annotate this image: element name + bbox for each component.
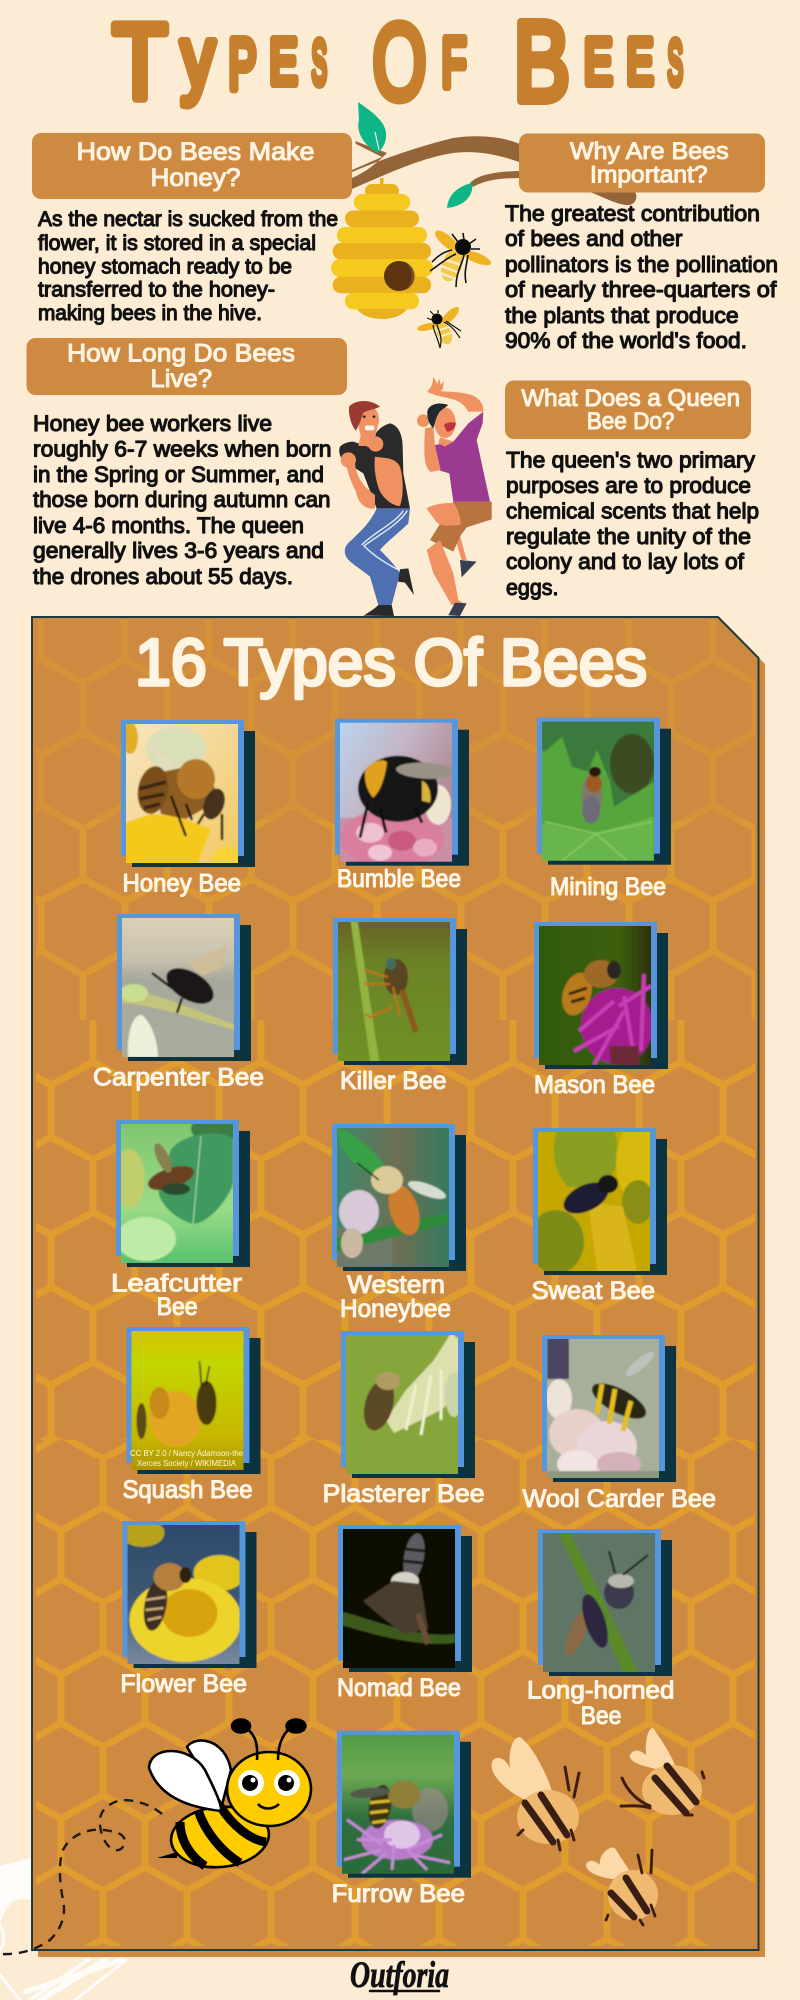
photo: killer bee bbox=[333, 917, 467, 1066]
card: squash bee bbox=[122, 1326, 260, 1504]
label: long-horned bee: Long-horned bbox=[527, 1677, 674, 1705]
text: why are bees important: The greatest contribution bbox=[505, 201, 760, 226]
label: plasterer bee: Plasterer Bee bbox=[322, 1480, 485, 1508]
photo: flower bee bbox=[120, 1519, 256, 1669]
text: how do bees make honey: As the nectar is sucked from the bbox=[38, 208, 338, 231]
photo: honey bee bbox=[121, 719, 255, 871]
text: how long do bees live: the drones about 55 days. bbox=[33, 564, 293, 589]
text: what does a queen bee do: colony and to lay lots of bbox=[506, 549, 745, 574]
label: leafcutter bee: Leafcutter bbox=[111, 1270, 242, 1298]
card: furrow bee bbox=[332, 1730, 471, 1908]
text: what does a queen bee do: The queen's two primary bbox=[506, 448, 755, 473]
photo: mining bee bbox=[537, 717, 671, 866]
photo credit: Xerces Society / WIKIMEDIA bbox=[137, 1458, 236, 1468]
label: furrow bee: Furrow Bee bbox=[332, 1880, 465, 1908]
panel shadow bbox=[38, 658, 765, 1957]
title: E bbox=[584, 26, 612, 98]
text: what does a queen bee do: purposes are to produce bbox=[506, 473, 751, 498]
text: S bbox=[668, 29, 683, 98]
title: P bbox=[228, 26, 256, 104]
text: how long do bees live: live 4-6 months. The queen bbox=[33, 513, 304, 538]
card: wool carder bee bbox=[522, 1334, 716, 1513]
text: why are bees important: the plants that produce bbox=[505, 303, 739, 328]
honeycomb pattern bbox=[36, 820, 755, 1946]
card: honey bee bbox=[121, 719, 255, 898]
card: mason bee bbox=[534, 921, 668, 1099]
label: mason bee: Mason Bee bbox=[534, 1071, 655, 1099]
panel: how do bees make honey heading: Honey? bbox=[150, 164, 240, 192]
title: E bbox=[626, 26, 654, 98]
text: why are bees important: pollinators is the pollination bbox=[505, 252, 778, 277]
text: what does a queen bee do: eggs. bbox=[506, 575, 558, 600]
label: western honeybee: Western bbox=[347, 1271, 445, 1299]
text: how do bees make honey: flower, it is stored in a special bbox=[38, 232, 316, 255]
photo: western honeybee bbox=[332, 1123, 466, 1273]
text: what does a queen bee do bbox=[506, 448, 759, 600]
text: how long do bees live: roughly 6-7 weeks when born bbox=[33, 436, 332, 462]
title: S bbox=[312, 29, 327, 98]
text: how long do bees live: generally lives 3-6 years and bbox=[33, 538, 324, 563]
photo: furrow bee bbox=[337, 1730, 471, 1879]
panel: how long do bees live heading bbox=[26, 338, 347, 395]
photo: plasterer bee bbox=[341, 1330, 475, 1479]
card: plasterer bee bbox=[322, 1330, 485, 1508]
card: killer bee bbox=[333, 917, 467, 1095]
text: why are bees important: of bees and other bbox=[505, 226, 682, 251]
photo: mason bee bbox=[534, 921, 668, 1070]
panel heading: 16 Types Of Bees bbox=[135, 625, 647, 699]
card: leafcutter bee bbox=[111, 1115, 250, 1321]
card: bumble bee bbox=[335, 718, 469, 893]
icon: bee small bbox=[416, 304, 462, 348]
brush strokes bbox=[0, 1858, 126, 2000]
title: F bbox=[442, 24, 466, 102]
text: how do bees make honey: making bees in the hive. bbox=[38, 302, 262, 325]
panel: why are bees important heading bbox=[519, 134, 765, 192]
panel: what does a queen bee do heading: What Does a Queen bbox=[521, 385, 740, 412]
card: long-horned bee bbox=[527, 1528, 674, 1730]
label: western honeybee bbox=[340, 1271, 451, 1323]
text: how long do bees live: Honey bee workers live bbox=[33, 411, 272, 436]
label: nomad bee: Nomad Bee bbox=[337, 1674, 461, 1702]
panel: what does a queen bee do heading: Bee Do? bbox=[587, 408, 674, 435]
title: T bbox=[112, 2, 168, 122]
panel: how do bees make honey heading: How Do Bees Make bbox=[76, 138, 314, 166]
label: squash bee: Squash Bee bbox=[122, 1476, 252, 1504]
icon: light bee two bbox=[621, 1728, 704, 1815]
label: long-horned bee: Bee bbox=[581, 1702, 621, 1730]
branch bbox=[352, 136, 636, 205]
panel body bbox=[32, 617, 758, 1950]
icon: leaf small bbox=[447, 183, 472, 208]
card: sweat bee bbox=[528, 1122, 667, 1305]
card: nomad bee bbox=[337, 1524, 472, 1702]
photo: sweat bee bbox=[528, 1122, 667, 1276]
icon: leaf large bbox=[358, 102, 386, 153]
card: carpenter bee bbox=[93, 913, 264, 1092]
text: why are bees important bbox=[505, 201, 778, 353]
text: what does a queen bee do: chemical scents that help bbox=[506, 499, 759, 524]
label: flower bee: Flower Bee bbox=[120, 1670, 247, 1698]
label: mining bee: Mining Bee bbox=[550, 873, 666, 901]
card: mining bee bbox=[537, 717, 671, 901]
person: man in purple shirt bbox=[417, 377, 492, 616]
photo credit bbox=[130, 1448, 243, 1468]
label: long-horned bee bbox=[527, 1677, 674, 1730]
logo: outforia: Outforia bbox=[350, 1955, 449, 1996]
photo: bumble bee bbox=[335, 718, 469, 869]
text: what does a queen bee do: regulate the unity of the bbox=[506, 524, 751, 549]
photo credit: CC BY 2.0 / Nancy Adamson-the bbox=[130, 1448, 243, 1458]
label: bumble bee: Bumble Bee bbox=[337, 865, 461, 893]
card: western honeybee bbox=[332, 1123, 466, 1323]
text: how long do bees live: in the Spring or Summer, and bbox=[33, 462, 324, 487]
photo: carpenter bee bbox=[117, 913, 251, 1062]
icon: bee large bbox=[430, 227, 493, 287]
label: killer bee: Killer Bee bbox=[340, 1067, 446, 1095]
text: how long do bees live bbox=[33, 411, 332, 589]
text: how do bees make honey: honey stomach ready to be bbox=[38, 256, 292, 278]
text: why are bees important: of nearly three-quarters of bbox=[505, 277, 777, 302]
label: leafcutter bee bbox=[111, 1270, 242, 1321]
label: western honeybee: Honeybee bbox=[340, 1295, 451, 1323]
panel: how do bees make honey heading bbox=[32, 133, 352, 199]
title: y bbox=[181, 10, 214, 106]
card: flower bee bbox=[120, 1519, 257, 1698]
text: why are bees important: 90% of the world's food. bbox=[505, 328, 747, 353]
title: O bbox=[372, 1, 426, 122]
photo: squash bee bbox=[126, 1326, 260, 1475]
label: sweat bee: Sweat Bee bbox=[532, 1277, 655, 1305]
illustration: scared people bbox=[339, 377, 492, 616]
text: how do bees make honey: transferred to the honey- bbox=[38, 278, 275, 302]
panel: why are bees important heading: Why Are Bees bbox=[570, 138, 729, 165]
panel: what does a queen bee do heading bbox=[505, 380, 751, 439]
icon: light bee one bbox=[492, 1737, 579, 1850]
icon: light bee three bbox=[586, 1847, 658, 1925]
photo: nomad bee bbox=[338, 1524, 472, 1673]
flight path: dashed trail bbox=[0, 1800, 162, 1954]
photo: long-horned bee bbox=[538, 1528, 672, 1677]
text: how long do bees live: those born during autumn can bbox=[33, 487, 330, 512]
panel: why are bees important heading: Important? bbox=[590, 162, 708, 189]
icon: beehive bbox=[331, 178, 433, 319]
text: how do bees make honey bbox=[38, 208, 338, 325]
label: leafcutter bee: Bee bbox=[157, 1293, 198, 1321]
person: man in black shirt bbox=[339, 401, 414, 616]
panel: how long do bees live heading: How Long Do Bees bbox=[67, 340, 295, 368]
label: honey bee: Honey Bee bbox=[122, 870, 241, 898]
panel: 16 types of bees bbox=[0, 617, 765, 1957]
photo: leafcutter bee bbox=[113, 1115, 250, 1268]
photo: wool carder bee bbox=[542, 1334, 676, 1483]
title: B bbox=[514, 0, 570, 124]
label: carpenter bee: Carpenter Bee bbox=[93, 1064, 264, 1092]
title: E bbox=[270, 26, 298, 98]
panel: how long do bees live heading: Live? bbox=[150, 365, 212, 393]
label: wool carder bee: Wool Carder Bee bbox=[522, 1485, 716, 1513]
icon: cartoon bee bbox=[149, 1720, 311, 1871]
